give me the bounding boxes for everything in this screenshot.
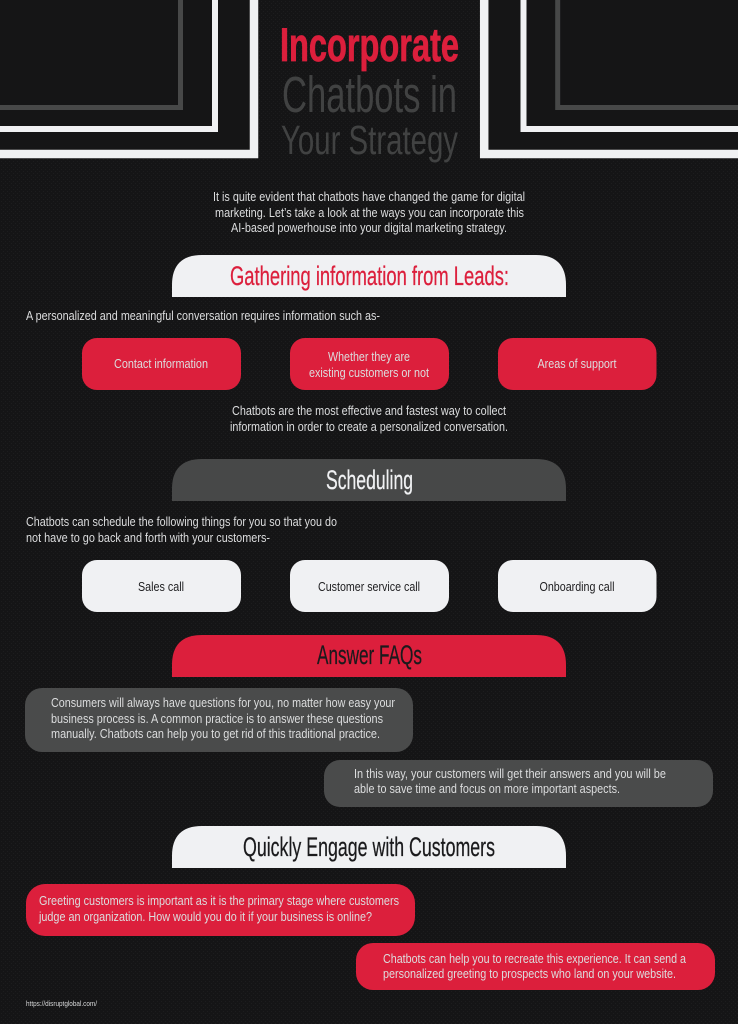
section header: Quickly Engage with Customers: [172, 826, 566, 868]
title: Chatbots in: [282, 66, 457, 123]
text: chatbots collect information: information in order to create a personalized conversation.: [230, 419, 508, 434]
bubble: greeting customers: judge an organization. How would you do it if your business is online?: [38, 909, 372, 924]
bubble: greeting customers: Greeting customers is important as it is the primary stage where customers: [39, 893, 399, 908]
section header: Scheduling: Scheduling: [326, 465, 413, 495]
bubble: consumers questions: [25, 688, 413, 752]
title: Your Strategy: [281, 117, 458, 163]
section header: Answer FAQs: [172, 635, 566, 677]
source url: https://disruptglobal.com/: [26, 999, 98, 1008]
bubble: save time: [324, 760, 713, 807]
card: Contact information: Contact information: [114, 356, 208, 371]
card: Customer service call: [290, 560, 449, 612]
card: Onboarding call: [498, 560, 656, 612]
card: Sales call: Sales call: [138, 579, 184, 594]
section header: Gathering information from Leads: [172, 255, 566, 297]
intro text: It is quite evident that chatbots have changed the game for digital: [213, 189, 525, 204]
title: Incorporate: [280, 18, 459, 71]
section header: Gathering information from Leads: Gathering information from Leads:: [230, 261, 509, 291]
card: Customer service call: Customer service call: [318, 579, 420, 594]
section header: Scheduling: [172, 459, 566, 501]
bubble: save time: In this way, your customers will get their answers and you will be: [354, 766, 666, 781]
bubble: personalized greeting: personalized greeting to prospects who land on your website.: [383, 966, 676, 981]
text: scheduling lead-in: Chatbots can schedule the following things for you so that you do: [26, 514, 337, 529]
section header: Quickly Engage with Customers: Quickly Engage with Customers: [243, 832, 495, 862]
card: Areas of support: Areas of support: [538, 356, 617, 371]
card: existing customers: [290, 338, 449, 390]
card: existing customers: Whether they are: [328, 349, 410, 364]
intro text: marketing. Let’s take a look at the ways you can incorporate this: [215, 205, 524, 220]
card: existing customers: existing customers or not: [309, 365, 429, 380]
intro text: AI-based powerhouse into your digital marketing strategy.: [231, 220, 507, 235]
bubble: greeting customers: [26, 884, 415, 936]
decorative frames: top right: [484, 0, 738, 154]
bubble: personalized greeting: [356, 943, 715, 990]
text: scheduling lead-in: not have to go back and forth with your customers-: [26, 530, 270, 545]
text: information lead-in: A personalized and meaningful conversation requires information such as-: [26, 308, 380, 323]
title: [280, 18, 459, 163]
bubble: consumers questions: business process is. A common practice is to answer these questions: [51, 711, 383, 726]
text: chatbots collect information: Chatbots are the most effective and fastest way to collect: [232, 403, 506, 418]
section header: Answer FAQs: Answer FAQs: [317, 640, 422, 670]
card: Sales call: [82, 560, 241, 612]
text: chatbots collect information: [230, 403, 508, 434]
text: scheduling lead-in: [26, 514, 337, 545]
bubble: save time: able to save time and focus on more important aspects.: [354, 781, 620, 796]
bubble: consumers questions: manually. Chatbots can help you to get rid of this traditional practice.: [51, 726, 380, 741]
bubble: consumers questions: Consumers will always have questions for you, no matter how easy your: [51, 695, 396, 710]
decorative frames: top left: [0, 0, 254, 154]
card: Onboarding call: Onboarding call: [540, 579, 615, 594]
card: Contact information: [82, 338, 241, 390]
intro text: [213, 189, 525, 235]
card: Areas of support: [498, 338, 656, 390]
